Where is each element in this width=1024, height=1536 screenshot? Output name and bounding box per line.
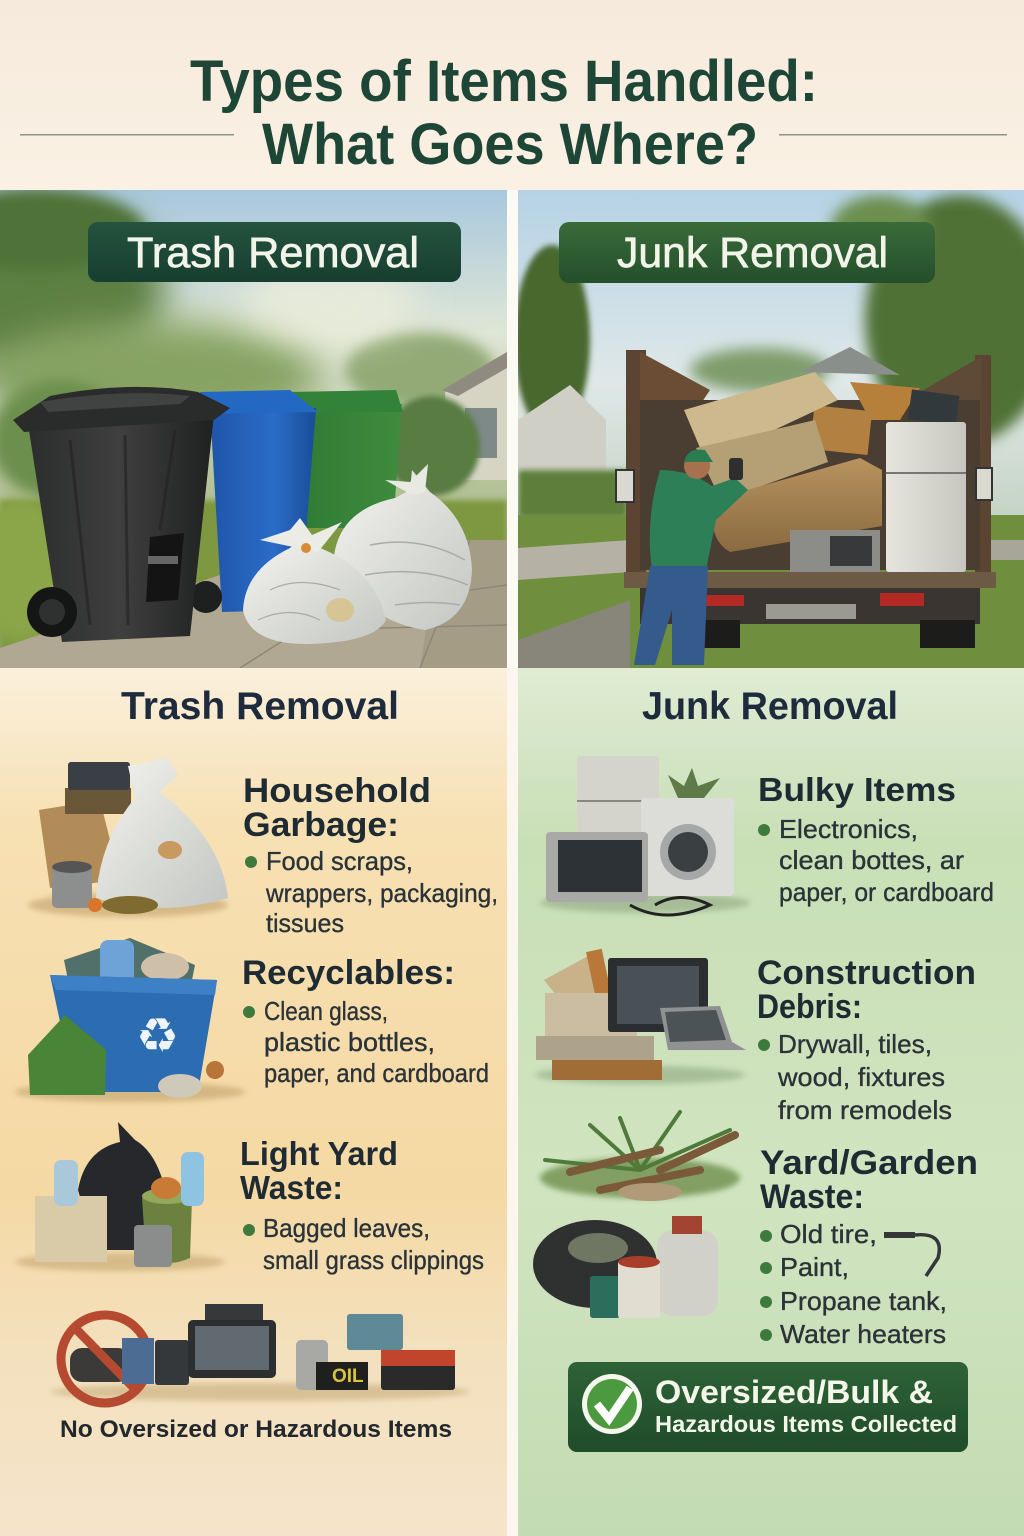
illustration: construction debris (535, 949, 746, 1084)
callout: oversized items collected: Hazardous Items Collected (655, 1411, 957, 1437)
title (190, 49, 818, 177)
illustration: not accepted items (50, 1304, 470, 1403)
text: household garbage: Food scraps, (266, 846, 413, 876)
icon: worker (634, 450, 748, 665)
illustration: recyclables: ♻ (136, 1008, 179, 1064)
text: construction debris: wood, fixtures (777, 1062, 945, 1092)
icon: green bin (288, 390, 403, 528)
photo: junk removal scene (514, 190, 1024, 668)
text: yard/garden waste: Waste: (760, 1178, 864, 1216)
pavement (0, 575, 426, 668)
text: construction debris: from remodels (778, 1095, 952, 1125)
text: household garbage: tissues (266, 908, 344, 938)
text: construction debris: Debris: (757, 988, 862, 1026)
banner: junk removal (559, 222, 935, 283)
text: yard/garden waste: Yard/Garden (760, 1144, 978, 1182)
text: bulky items: Electronics, (779, 814, 918, 844)
photo: trash removal scene (0, 190, 507, 668)
text: household garbage: Garbage: (243, 806, 399, 844)
text: recyclables: plastic bottles, (264, 1027, 435, 1057)
text: yard/garden waste: Propane tank, (780, 1286, 947, 1316)
text: construction debris: Drywall, tiles, (778, 1029, 932, 1059)
icon: truck (616, 350, 996, 648)
text: yard/garden waste: Water heaters (780, 1319, 946, 1349)
title: What Goes Where? (262, 112, 758, 177)
text: light yard waste: Bagged leaves, (263, 1213, 430, 1243)
icon: front trash bag (243, 518, 386, 644)
title: Types of Items Handled: (190, 49, 818, 114)
heading: junk removal: Junk Removal (642, 685, 898, 728)
text: recyclables: Clean glass, (264, 996, 388, 1026)
header (0, 0, 1024, 190)
icon: blue bin (190, 390, 318, 613)
illustration: household garbage (28, 758, 228, 917)
panel: junk removal (518, 668, 1024, 1536)
text: bulky items: clean bottes, ar (779, 845, 964, 875)
text: recyclables: paper, and cardboard (264, 1058, 489, 1088)
text: light yard waste (240, 1135, 484, 1275)
icon: hose nozzle (884, 1235, 939, 1276)
heading: trash removal: Trash Removal (121, 685, 399, 728)
banner: junk removal: Junk Removal (617, 229, 888, 277)
illustration: not accepted items: OIL (332, 1366, 364, 1387)
callout: oversized items collected (568, 1362, 968, 1452)
banner: trash removal: Trash Removal (127, 229, 419, 277)
illustration: yard waste and tire (533, 1112, 740, 1318)
text: recyclables: Recyclables: (242, 954, 455, 992)
illustration: light yard waste (15, 1122, 225, 1271)
icon: right trash bag (334, 464, 472, 630)
icon: check mark (582, 1374, 642, 1434)
text: bulky items: paper, or cardboard (779, 877, 994, 907)
text: bulky items (758, 771, 994, 907)
text: recyclables (242, 954, 489, 1088)
text: light yard waste: small grass clippings (263, 1245, 484, 1275)
text: bulky items: Bulky Items (758, 771, 956, 808)
banner: trash removal (88, 222, 461, 282)
panel: trash removal (0, 668, 507, 1536)
caption: no oversized or hazardous items: No Oversized or Hazardous Items (60, 1416, 452, 1443)
text: yard/garden waste: Paint, (780, 1252, 849, 1282)
text: construction debris (757, 954, 976, 1125)
text: household garbage: wrappers, packaging, (265, 878, 498, 908)
text: light yard waste: Light Yard (240, 1135, 398, 1172)
illustration: bulky items (540, 756, 750, 915)
icon: junk load (684, 372, 966, 572)
text: household garbage: Household (243, 772, 431, 810)
text: yard/garden waste: Old tire, (780, 1219, 877, 1249)
text: light yard waste: Waste: (240, 1169, 343, 1206)
callout: oversized items collected: Oversized/Bulk & (655, 1374, 933, 1410)
text: construction debris: Construction (757, 954, 976, 992)
text: yard/garden waste (760, 1144, 978, 1349)
house (442, 352, 507, 480)
illustration: recyclables (15, 938, 245, 1102)
text: household garbage (243, 772, 498, 938)
icon: black bin (13, 387, 230, 642)
